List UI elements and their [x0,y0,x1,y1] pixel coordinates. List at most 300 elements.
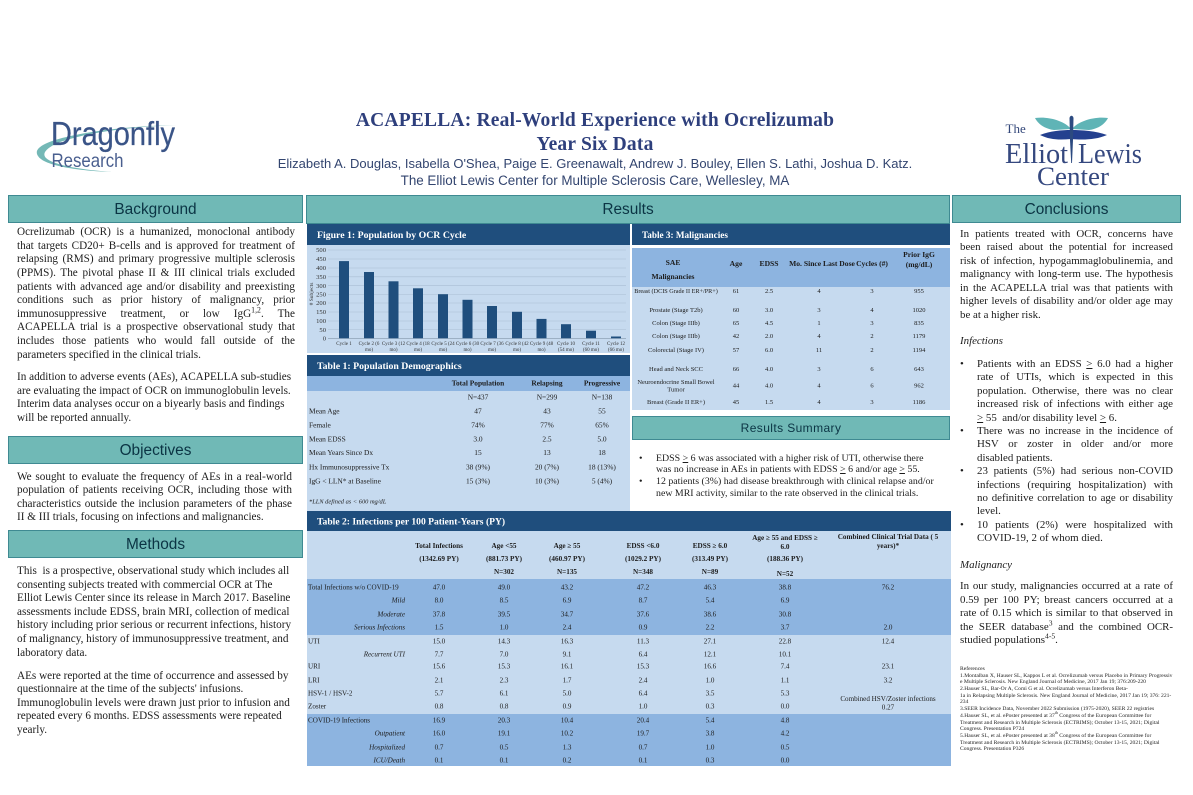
panel: table 2 infections per 100 patient-years: 8.7 [639,596,648,604]
panel: table 1 population demographics: Female [309,420,331,430]
panel: table 2 infections per 100 patient-years: 6.9 [563,596,572,604]
panel: table 2 infections per 100 patient-years: Hospitalized [368,744,405,752]
text: methods: Elliot Lewis Center since its release in March 2017. Baseline [17,592,290,604]
panel: table 2 infections per 100 patient-years: 37.8 [433,610,446,618]
text: malignancy paragraph: 0.59 per 100 PY; breast cancers occurred at a [960,594,1173,606]
panel: table 2 infections per 100 patient-years: 20.4 [637,716,650,724]
panel: figure 1 chart: Cycle 3 (12 [382,342,406,347]
panel: table 2 infections per 100 patient-years: 2.0 [884,624,893,632]
panel: figure 1 chart: Figure 1: Population by OCR Cycle [317,230,467,241]
panel: table 3 malignancies: Cycles (#) [856,259,888,268]
panel: table 3 malignancies: Breast (Grade II ER+) [647,399,705,406]
panel: table 2 infections per 100 patient-years: N=348 [633,568,653,576]
panel: figure 1 chart: 450 [316,256,327,263]
text: references: 4.Hauser SL, et al. ePoster presented at 37th Congress of the European Committee for [960,711,1151,719]
text: background: Ocrelizumab (OCR) is a humanized, monoclonal antibody [17,226,295,238]
panel: table 2 infections per 100 patient-years: 27.1 [704,638,717,646]
panel: table 1 population demographics: Hx Immunosuppressive Tx [309,462,390,472]
panel: table 2 infections per 100 patient-years: 23.1 [882,662,895,670]
text: methods: AEs were reported at the time of occurrence and assessed by [17,670,288,682]
panel: table 1 population demographics: 47 [474,406,482,416]
text: background: patients with advanced age and/or disability and preexisting [17,281,295,293]
text: methods: yearly. [17,724,47,736]
panel: table 2 infections per 100 patient-years: 1.5 [435,624,444,632]
panel: table 2 infections per 100 patient-years: 1.0 [639,702,648,710]
heading: background: Background [114,201,197,218]
panel: table 2 infections per 100 patient-years: 2.4 [639,676,648,684]
panel: figure 1 chart: mo) [439,348,447,353]
panel: table 2 infections per 100 patient-years: 46.3 [704,584,717,592]
panel: table 3 malignancies: Malignancies [651,272,695,281]
panel: table 2 infections per 100 patient-years: 10.2 [561,730,574,738]
panel: table 2 infections per 100 patient-years: 6.0 [781,543,790,551]
panel: table 2 infections per 100 patient-years: 15.3 [498,662,511,670]
panel: table 1 population demographics: 18 (13%) [588,462,616,472]
panel: table 2 infections per 100 patient-years: 6.4 [639,690,648,698]
panel: table 2 infections per 100 patient-years: 3.7 [781,624,790,632]
panel: figure 1 chart: 400 [316,265,327,272]
text: background: includes those patients who would fall outside of the [17,335,295,347]
text: objectives: characteristics outside the inclusion parameters of the phase [17,498,292,510]
panel: table 2 infections per 100 patient-years: 1.0 [706,744,715,752]
logo: The Elliot Lewis Center: Elliot [1005,139,1068,170]
panel: figure 1 chart: 0 [323,336,327,342]
text: methods: This is a prospective, observational study which includes all [17,565,289,577]
panel: figure 1 chart: 50 [319,327,327,334]
panel: table 2 infections per 100 patient-years: 0.1 [435,756,444,764]
panel: table 3 malignancies: Head and Neck SCC [649,366,703,373]
panel: table 1 population demographics: 77% [540,420,554,430]
panel: table 3 malignancies: 44 [733,382,740,390]
text: infections bullets: There was no increase in the incidence of [977,425,1173,437]
panel: table 1 population demographics: 65% [595,420,609,430]
text: infections bullets [960,358,1173,544]
panel: table 2 infections per 100 patient-years: 0.8 [435,702,444,710]
panel: table 2 infections per 100 patient-years: LRI [308,676,320,684]
text: infections bullets: COVID-19, 2 of whom died. [977,532,1103,544]
panel: figure 1 chart: mo) [537,348,546,353]
panel: table 3 malignancies: Breast (DCIS Grade II ER+/PR+) [634,288,718,295]
panel: table 2 infections per 100 patient-years: 0.1 [500,756,509,764]
heading: methods [8,530,303,558]
panel: table 3 malignancies [632,224,950,410]
panel: figure 1 chart: Cycle 12 [607,342,625,347]
text: references: Congress. Presentation P724 [960,726,1024,732]
panel: table 3 malignancies: 955 [914,288,924,295]
text: background: conditions such as prior history of malignancy, prior [17,294,295,306]
text: background: Interim data analyses occur on a biyearly basis and findings [17,398,284,410]
panel: table 2 infections per 100 patient-years: 8.5 [500,596,509,604]
panel: figure 1 chart: Cycle 7 (36 [480,342,504,347]
panel: table 2 infections per 100 patient-years: 5.7 [435,690,444,698]
panel: figure 1 chart: mo) [488,348,496,353]
panel: table 2 infections per 100 patient-years: 3.5 [706,690,715,698]
panel: table 2 infections per 100 patient-years: 12.1 [704,650,717,658]
panel: table 3 malignancies: Colon (Stage IIIb) [652,333,700,340]
heading: results summary: Results Summary [741,421,841,435]
panel: table 2 infections per 100 patient-years: 2.4 [563,624,572,632]
panel: table 2 infections per 100 patient-years: (1029.2 PY) [625,555,662,563]
panel: table 3 malignancies: 1.5 [765,399,773,406]
text: • [960,465,964,477]
title: Year Six Data [536,134,654,155]
panel: table 2 infections per 100 patient-years: 12.4 [882,638,895,646]
text: results summary [639,452,934,499]
panel: table 2 infections per 100 patient-years: N=52 [777,570,794,578]
text: background [17,226,295,424]
panel: table 2 infections per 100 patient-years: 0.7 [435,744,444,752]
panel: table 1 population demographics: 13 [543,448,551,457]
panel: table 2 infections per 100 patient-years: 47.2 [637,584,650,592]
text: methods [17,565,292,736]
text: references: 3.SEER Incidence Data, November 2022 Submission (1975-2020), SEER 22 registries [960,706,1154,712]
panel: table 3 malignancies: 1 [817,320,821,327]
panel: table 3 malignancies: 1186 [913,399,926,406]
text: infections heading: Infections [960,334,1003,346]
text: • [639,452,642,464]
panel: table 1 population demographics: N=437 [468,392,489,402]
panel: table 1 population demographics: Relapsing [531,378,563,388]
panel: table 2 infections per 100 patient-years: 38.8 [779,584,792,592]
text: conclusions intro: be at a higher risk. [960,309,1041,321]
panel: table 2 infections per 100 patient-years: 1.3 [563,744,572,752]
heading: objectives: Objectives [120,442,191,459]
panel: table 2 infections per 100 patient-years: 3.2 [884,676,893,684]
text: • [960,358,964,370]
panel: table 1 population demographics: Progressive [584,378,621,388]
panel: table 2 infections per 100 patient-years: 7.7 [435,650,444,658]
panel: table 2 infections per 100 patient-years: 38.6 [704,610,717,618]
text: infections bullets: rate of UTIs, which is expected in this [977,371,1173,383]
text: background: In addition to adverse events (AEs), ACAPELLA sub-studies [17,371,291,383]
text: infections bullets: > 55 and/or disability level > 6. [977,412,1117,424]
panel: table 2 infections per 100 patient-years: URI [308,662,321,670]
logo: The Elliot Lewis Center: Center [1037,162,1109,191]
heading: conclusions: Conclusions [1025,201,1108,218]
panel: table 1 population demographics: 55 [598,406,606,416]
panel: figure 1 chart: 500 [316,247,327,254]
authors and affiliation: The Elliot Lewis Center for Multiple Sclerosis Care, Wellesley, MA [401,173,789,188]
logo: Dragonfly Research [37,116,177,172]
panel: table 3 malignancies: 4 [817,333,821,340]
panel: table 2 infections per 100 patient-years: 76.2 [882,584,895,592]
text: conclusions intro: higher levels of disability and/or older age may [960,295,1173,307]
logo: Dragonfly Research: Research [52,150,124,172]
panel: table 2 infections per 100 patient-years: (460.97 PY) [549,555,586,563]
authors and affiliation: Elizabeth A. Douglas, Isabella O'Shea, Paige E. Greenawalt, Andrew J. Bouley, Ellen S. Lathi, Joshua D. Katz. [278,156,912,170]
text: • [639,476,642,487]
text: infections bullets: population. Otherwise, there was no clear [977,385,1173,397]
panel: table 2 infections per 100 patient-years: 19.1 [498,730,511,738]
panel: table 2 infections per 100 patient-years: 49.0 [498,584,511,592]
panel: table 2 infections per 100 patient-years: ICU/Death [372,756,405,764]
text: background: relapsing (RMS) and primary progressive multiple sclerosis [17,253,295,265]
text: background: ACAPELLA trial is a prospective observational study that [17,321,295,333]
panel: figure 1 chart: 300 [316,283,327,290]
panel: table 2 infections per 100 patient-years: 4.2 [781,730,790,738]
panel: table 2 infections per 100 patient-years: 10.4 [561,716,574,724]
panel: table 2 infections per 100 patient-years: Mild [391,596,405,604]
panel: table 2 infections per 100 patient-years: 6.9 [781,596,790,604]
panel: figure 1 chart: Cycle 6 (30 [456,342,480,347]
text: conclusions intro [960,228,1173,321]
text: references: References [960,666,985,672]
panel: table 2 infections per 100 patient-years: 47.0 [433,584,446,592]
text: methods: Immunoglobulin levels were drawn just prior to infusion and [17,697,290,709]
panel: table 1 population demographics: 3.0 [473,434,483,444]
panel: table 3 malignancies: 66 [733,366,740,373]
text: malignancy paragraph: studied populations4-5. [960,632,1058,646]
panel: table 3 malignancies: 4 [817,382,821,390]
text: malignancy paragraph [960,580,1173,646]
text: infections bullets: disabled patients. [977,452,1053,464]
panel: table 2 infections per 100 patient-years: 16.0 [433,730,446,738]
panel: figure 1 chart: 250 [316,292,327,298]
panel: table 3 malignancies: 3 [870,320,874,327]
text: methods: questionnaire at the time of the subjects' infusions. [17,683,243,695]
panel: table 1 population demographics [307,355,630,511]
panel: table 1 population demographics: 5 (4%) [592,476,613,486]
panel: table 2 infections per 100 patient-years: 10.1 [779,650,792,658]
panel: figure 1 chart: (54 mo) [558,348,574,353]
panel: figure 1 chart: mo) [365,348,373,353]
panel: table 3 malignancies: 42 [733,333,739,340]
text: background: (PPMS). The pivotal phase II & III clinical trials excluded [17,267,295,279]
panel: table 1 population demographics: 74% [471,420,485,430]
text: infections bullets: increased risk of infections with either age [977,398,1173,410]
panel: table 2 infections per 100 patient-years: Age ≥ 55 [554,542,581,550]
panel: table 2 infections per 100 patient-years: Recurrent UTI [363,650,406,658]
panel: table 2 infections per 100 patient-years: 3.8 [706,730,715,738]
text: references: Treatment and Research in Multiple Sclerosis (ECTRIMS); October 13-15, 2021; Digital [960,720,1159,726]
panel: table 2 infections per 100 patient-years: EDSS <6.0 [627,542,660,550]
panel: table 1 population demographics: 38 (9%) [466,462,491,472]
panel: table 2 infections per 100 patient-years: 5.4 [706,596,715,604]
heading: conclusions [952,195,1181,223]
heading: results: Results [602,201,654,218]
panel: table 3 malignancies: Neuroendocrine Small Bowel [637,379,715,386]
text: references: 1a in Relapsing Multiple Sclerosis. New England Journal of Medicine, 2017 Jan 19; 376: 221- [960,693,1171,699]
panel: table 3 malignancies: 45 [733,399,739,406]
authors and affiliation [278,156,912,188]
panel: table 3 malignancies: Tumor [667,386,686,394]
panel: table 3 malignancies: 4 [817,288,821,295]
panel: table 3 malignancies: Prostate (Stage T2b) [649,307,703,314]
panel: table 3 malignancies: 2 [870,347,874,354]
panel: figure 1 chart: Cycle 1 [336,342,352,347]
panel: table 2 infections per 100 patient-years: HSV-1 / HSV-2 [308,690,353,698]
logo: The Elliot Lewis Center: The [1006,121,1026,136]
text: objectives [17,470,292,523]
panel: table 3 malignancies: Mo. Since Last Dose [789,259,856,268]
panel: table 2 infections per 100 patient-years: (1342.69 PY) [419,555,459,563]
text: objectives: II & III trials, focusing on infections and malignancies. [17,511,264,523]
panel: figure 1 chart: Cycle 2 (6 [359,342,380,347]
panel: table 3 malignancies: 6 [870,382,874,390]
text: • [960,425,964,437]
panel: table 2 infections per 100 patient-years: 5.3 [781,690,790,698]
text: infections bullets: 10 patients (2%) were hospitalized with [977,519,1173,531]
panel: table 2 infections per 100 patient-years: Outpatient [375,730,406,738]
text: objectives: We sought to evaluate the frequency of AEs in a real-world [17,470,292,482]
logo: The Elliot Lewis Center [1005,116,1142,191]
panel: table 2 infections per 100 patient-years: 16.3 [561,638,574,646]
text: references: Congress. Presentation P326 [960,746,1024,752]
panel: table 2 infections per 100 patient-years: 20.3 [498,716,511,724]
panel: table 2 infections per 100 patient-years: 2.1 [435,676,444,684]
text: references: e Multiple Sclerosis. New England Journal of Medicine, 2017 Jan 19; 376:209-220 [960,679,1146,685]
panel: table 2 infections per 100 patient-years: 16.9 [433,716,446,724]
panel: table 1 population demographics: Total Population [452,378,504,388]
text: methods: laboratory data. [17,647,87,659]
panel: table 2 infections per 100 patient-years: 5.0 [563,690,572,698]
text: methods: consenting subjects treated with commercial OCR at The [17,579,272,591]
text: methods: history including prior serious or recurrent infections, history [17,619,291,631]
panel: table 2 infections per 100 patient-years: 0.9 [563,702,572,710]
text: objectives: population of patients receiving OCR, including those with [17,484,292,496]
panel: table 3 malignancies: EDSS [760,259,778,268]
text: infections bullets: infections (requiring hospitalization) with [977,479,1173,491]
panel: table 3 malignancies: 3 [870,399,874,406]
panel: table 2 infections per 100 patient-years: 0.5 [500,744,509,752]
panel: table 2 infections per 100 patient-years: 11.3 [637,638,650,646]
text: references: 2.Hauser SL, Bar-Or A, Comi G et al. Ocrelizumab versus Interferon Beta- [960,686,1128,692]
panel: table 1 population demographics: N=299 [537,392,558,402]
panel: table 3 malignancies: 2.0 [765,333,773,340]
text: references [960,666,1172,752]
panel: table 2 infections per 100 patient-years: Serious Infections [354,624,405,632]
panel: table 2 infections per 100 patient-years: 1.1 [781,676,790,684]
panel: table 2 infections per 100 patient-years: N=302 [494,568,514,576]
text: conclusions intro: malignancy with long-term use. The hypothesis [960,268,1173,280]
text: methods: of malignancy, history of immunosuppressive treatment, and [17,633,288,645]
panel: table 1 population demographics: Table 1: Population Demographics [317,361,462,372]
panel: table 2 infections per 100 patient-years: 0.1 [639,756,648,764]
text: background: are evaluating the impact of OCR on immunoglobulin levels. [17,385,291,397]
panel: table 2 infections per 100 patient-years: 0.8 [500,702,509,710]
panel: table 2 infections per 100 patient-years: 34.7 [561,610,574,618]
panel: table 2 infections per 100 patient-years: 37.6 [637,610,650,618]
text: results summary: was no increase in AEs in patients with EDSS > 6 and/or age > 55. [656,464,920,475]
title: ACAPELLA: Real-World Experience with Ocrelizumab [356,110,834,131]
panel: table 3 malignancies: 65 [733,320,739,327]
panel: table 2 infections per 100 patient-years: 30.8 [779,610,792,618]
heading: background [8,195,303,223]
text: references: 5.Hauser SL, et al. ePoster presented at 38th Congress of the European Committee for [960,731,1151,739]
panel: table 3 malignancies: 1194 [913,347,926,354]
heading: results [306,195,950,224]
panel: table 2 infections per 100 patient-years: 6.4 [639,650,648,658]
panel: table 2 infections per 100 patient-years [307,511,951,766]
text: infections bullets: no definitive correlation to age or disability [977,492,1173,504]
panel: table 2 infections per 100 patient-years: (188.36 PY) [767,555,804,563]
panel: figure 1 chart: # Subjects [309,283,315,305]
panel: table 2 infections per 100 patient-years: N=89 [702,568,719,576]
panel: table 3 malignancies: SAE [666,258,680,267]
panel: table 2 infections per 100 patient-years: 14.3 [498,638,511,646]
panel: table 1 population demographics: 43 [543,406,551,416]
panel: table 3 malignancies: 61 [733,288,739,295]
panel: table 2 infections per 100 patient-years: EDSS ≥ 6.0 [693,542,728,550]
panel: table 2 infections per 100 patient-years: 0.27 [882,704,895,712]
text: results summary: 12 patients (3%) had disease breakthrough with clinical relapse and/or [656,476,934,487]
panel: table 3 malignancies: 4.0 [765,366,773,373]
panel: table 2 infections per 100 patient-years: COVID-19 Infections [308,716,370,724]
panel: table 2 infections per 100 patient-years: 39.5 [498,610,511,618]
panel: table 1 population demographics: 15 (3%) [466,476,491,486]
panel: figure 1 chart: Cycle 10 [557,342,575,347]
text: malignancy paragraph: In our study, malignancies occurred at a rate of [960,580,1173,592]
panel: table 3 malignancies: Prior IgG [903,250,935,259]
panel: table 2 infections per 100 patient-years: Total Infections [415,542,463,550]
panel: table 3 malignancies: 4 [817,399,821,406]
panel: table 2 infections per 100 patient-years: 7.4 [781,662,790,670]
logo: The Elliot Lewis Center: Lewis [1078,139,1142,170]
panel: figure 1 chart [307,223,630,353]
text: background: parameters specified in the clinical trials. [17,349,201,361]
panel: table 1 population demographics: Mean Years Since Dx [309,448,373,457]
panel: figure 1 chart: Cycle 8 (42 [505,342,529,347]
panel: table 2 infections per 100 patient-years: 1.0 [500,624,509,632]
text: conclusions intro: risk of infection, hypogammaglobulinemia, and [960,255,1173,267]
text: conclusions intro: been raised about the potential for increased [960,241,1173,253]
panel: figure 1 chart: mo) [513,348,521,353]
panel: table 1 population demographics: 15 [474,448,482,457]
panel: table 2 infections per 100 patient-years: Total Infections w/o COVID-19 [308,584,399,592]
panel: table 2 infections per 100 patient-years: 7.0 [500,650,509,658]
panel: table 3 malignancies: 2.5 [765,288,773,295]
panel: figure 1 chart: mo) [389,348,398,353]
panel: table 2 infections per 100 patient-years: Age ≥ 55 and EDSS ≥ [752,534,818,542]
panel: table 3 malignancies: 3 [817,307,821,314]
panel: figure 1 chart: (66 mo) [608,348,624,353]
panel: table 3 malignancies: Age [730,259,743,268]
text: conclusions intro: in the ACAPELLA trial was that patients with [960,282,1173,294]
panel: table 1 population demographics: Mean Age [309,406,340,416]
text: • [960,519,964,531]
text: infections bullets: HSV or zoster in older and/or more [977,438,1173,450]
title [356,110,834,155]
panel: table 3 malignancies: (mg/dL) [906,260,933,269]
panel: table 2 infections per 100 patient-years: Moderate [376,610,405,618]
panel: table 2 infections per 100 patient-years: 0.3 [706,702,715,710]
panel: table 2 infections per 100 patient-years: Combined HSV/Zoster infections [840,695,936,703]
panel: table 2 infections per 100 patient-years: Age <55 [491,542,517,550]
panel: table 2 infections per 100 patient-years: Table 2: Infections per 100 Patient-Years (PY) [317,516,505,528]
panel: figure 1 chart: 100 [316,318,327,325]
panel: figure 1 chart: mo) [414,348,422,353]
panel: table 2 infections per 100 patient-years: 2.3 [500,676,509,684]
panel: table 1 population demographics: IgG < LLN* at Baseline [309,476,382,486]
panel: table 2 infections per 100 patient-years: 19.7 [637,730,650,738]
panel: table 2 infections per 100 patient-years: N=135 [557,568,577,576]
text: background: that targets CD20+ B-cells and is approved for treatment of [17,240,295,252]
panel: table 3 malignancies: 962 [914,382,924,390]
panel: table 2 infections per 100 patient-years: 0.3 [706,756,715,764]
text: background: will be reported annually. [17,412,131,424]
panel: table 1 population demographics: 10 (3%) [535,476,560,486]
panel: figure 1 chart: (60 mo) [583,348,599,353]
text: background: immunosuppressive treatment, or low IgG1,2. The [17,305,295,320]
panel: table 2 infections per 100 patient-years: 0.2 [563,756,572,764]
panel: figure 1 chart: Cycle 9 (48 [530,342,554,347]
heading: methods: Methods [126,536,185,553]
panel: table 3 malignancies: Colorectal (Stage IV) [648,347,704,354]
panel: table 2 infections per 100 patient-years: 43.2 [561,584,574,592]
panel: table 3 malignancies: 4.5 [765,320,773,327]
panel: table 3 malignancies: 11 [816,347,822,354]
panel: table 3 malignancies: 835 [914,320,924,327]
